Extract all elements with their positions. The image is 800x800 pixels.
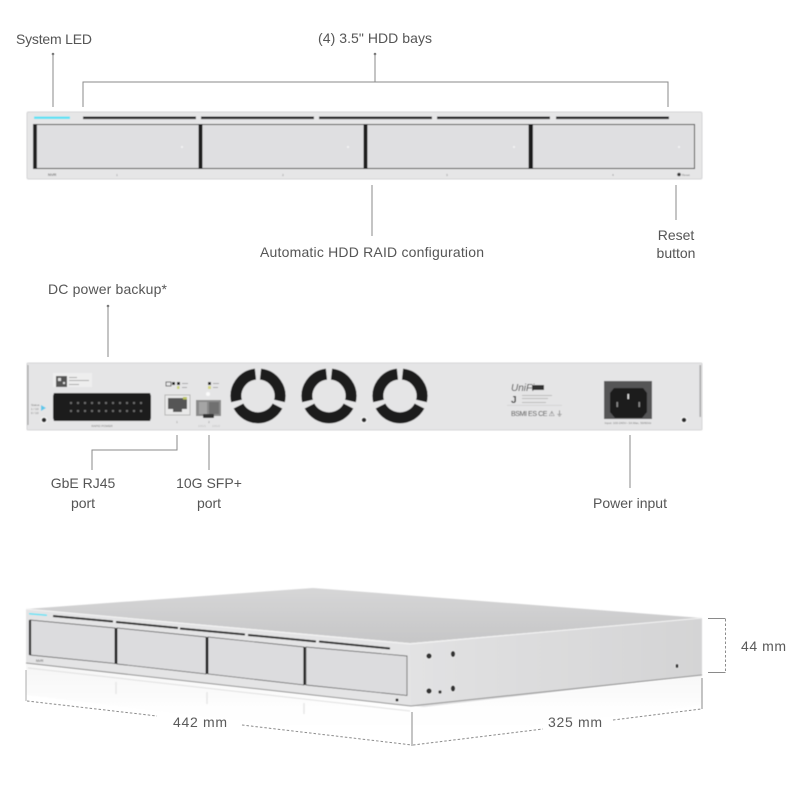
- RJ45 port: [165, 382, 190, 424]
- drive bays: [30, 620, 407, 696]
- LED bar: [29, 613, 47, 616]
- front panel markings: Reset: [682, 173, 690, 177]
- dimension: depth 325 mm: 325 mm: [548, 714, 602, 730]
- product logo and regulatory marks: UniFi: [511, 383, 535, 394]
- top face: [26, 588, 702, 643]
- arrow: DC power leader: [107, 305, 109, 357]
- power inlet: [604, 381, 652, 425]
- arrow: System LED leader: [52, 53, 54, 107]
- system LED bar: [34, 116, 70, 119]
- rear LED indicator: 1 / 10: [31, 407, 39, 411]
- fan vent 2: [307, 374, 351, 418]
- arrow: SFP leader: [208, 435, 210, 470]
- product logo and regulatory marks: J: [511, 395, 517, 406]
- panel: perspective view of device: [26, 588, 702, 742]
- arrow: HDD bays bracket: [83, 53, 668, 107]
- SFP+ port: 10G/2: [212, 424, 220, 428]
- label: Power input: Power input: [593, 495, 667, 511]
- power inlet: Input: 100-240V~ 3A Max, 50/60Hz: [605, 421, 652, 425]
- label: DC power backup: DC power backup*: [48, 281, 168, 297]
- reflection: [26, 664, 702, 742]
- screws: [41, 417, 687, 423]
- rear LED indicator: [31, 403, 46, 415]
- DC power connector: RAPID POWER: [91, 424, 113, 428]
- fan vent 1: [236, 374, 280, 418]
- side screws: [426, 651, 679, 694]
- dimension: height 44 mm: [708, 618, 786, 672]
- label: Reset button: button: [657, 245, 695, 261]
- fan vent 3: [378, 374, 422, 418]
- arrow: RAID leader: [371, 185, 373, 236]
- label: GbE RJ45 port: port: [71, 495, 95, 511]
- drive bay vents: [83, 116, 669, 119]
- front panel markings: 3: [446, 173, 448, 177]
- RJ45 port: 1: [176, 420, 178, 424]
- dimension: height 44 mm: 44 mm: [741, 638, 786, 654]
- product logo and regulatory marks: BSMI ES CE ⚠ ⏚: [511, 410, 563, 418]
- front panel markings: 2: [282, 173, 284, 177]
- front panel markings: NVR: [48, 172, 57, 177]
- DC power connector: [53, 393, 151, 428]
- rear LED indicator: 0 / 10: [31, 411, 39, 415]
- vents: [53, 616, 390, 648]
- reset and model marks: NVR: [36, 659, 44, 663]
- product logo and regulatory marks: [507, 383, 563, 418]
- front panel markings: 4: [612, 173, 614, 177]
- SFP+ port: 2: [208, 420, 210, 424]
- label: 10G SFP+ port: port: [197, 495, 221, 511]
- dimension: width 442 mm: 442 mm: [173, 714, 227, 730]
- arrow: RJ45 leader: [92, 435, 177, 470]
- label: HDD bays: (4) 3.5" HDD bays: [318, 30, 432, 46]
- drive bays: [33, 124, 694, 169]
- SFP+ port: [196, 382, 221, 428]
- dimension: depth 325 mm: [413, 678, 702, 745]
- arrow: Power input leader: [629, 435, 631, 488]
- reset and model marks: [36, 659, 398, 702]
- label: Reset button: Reset: [658, 227, 694, 243]
- rear LED indicator: Status: [31, 403, 40, 407]
- QR sticker: [53, 373, 92, 387]
- label: 10G SFP+ port: 10G SFP+: [176, 475, 242, 491]
- dimension: width 442 mm: [26, 670, 412, 746]
- front face: [26, 609, 424, 707]
- panel: rear view of device: [27, 363, 702, 430]
- label: Automatic HDD RAID configuration: Automatic HDD RAID configuration: [260, 244, 484, 260]
- front panel markings: 1: [116, 173, 118, 177]
- front panel markings: [48, 172, 690, 177]
- arrow: Reset leader: [675, 185, 677, 220]
- side face: [410, 618, 702, 707]
- panel: front view of device: [27, 112, 702, 179]
- label: System LED: System LED: [16, 31, 92, 47]
- SFP+ port: 10G/1: [198, 424, 206, 428]
- label: GbE RJ45 port: GbE RJ45: [51, 475, 115, 491]
